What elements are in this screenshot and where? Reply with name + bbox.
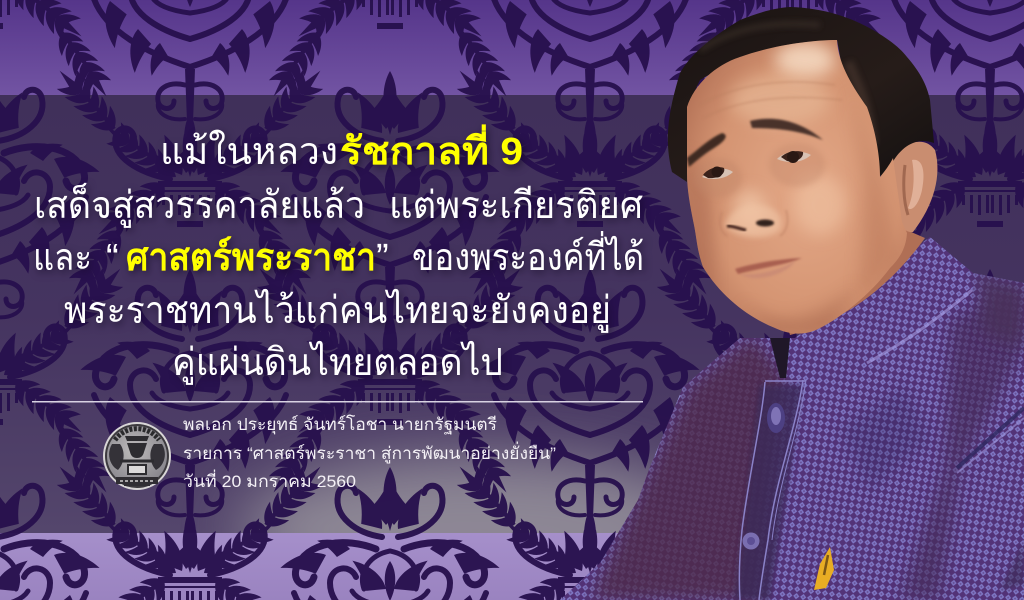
seal bottom band [116,477,158,486]
seal urn [125,436,149,458]
caption line 1: speaker: พลเอก ประยุทธ์ จันทร์โอชา นายกรัฐมนตรี [183,414,497,435]
source caption [183,414,556,491]
mouth [735,258,802,274]
jacket [560,230,1024,600]
quote line 3 [33,231,644,279]
quote line 1: รัชกาลที่ 9 [340,124,523,173]
placket stitching [739,382,765,600]
lapel pin [814,547,834,590]
quote line 4: พระราชทานไว้แก่คนไทยจะยังคงอยู่ [64,289,611,333]
cheek highlights [794,175,846,235]
caption line 2: programme: รายการ “ศาสตร์พระราชา สู่การพัฒนาอย่างยั่งยืน” [183,441,556,464]
seal lions [109,444,165,470]
panel: dark translucent band behind quote [0,95,1024,533]
quote line 2: แต่พระเกียรติยศ [389,185,643,227]
quote line 3: ของพระองค์ที่ได้ [412,231,644,279]
face [680,30,910,340]
quote line 2 [34,182,643,228]
eyes [702,169,733,179]
eyebrows [687,133,726,167]
quote line 3: “ [106,237,119,279]
quote line 1 [160,124,523,173]
quote line 3: ” [376,237,389,279]
caption line 3: date: วันที่ 20 มกราคม 2560 [183,469,356,491]
buttons [767,403,785,433]
quote text [33,124,644,385]
seal top lettering [115,429,159,440]
quote line 1: แม้ในหลวง [160,130,338,173]
portrait: man in purple silk jacket [560,7,1024,600]
quote line 2: เสด็จสู่สวรรคาลัยแล้ว [34,182,365,228]
neck [780,225,925,335]
forehead wrinkles [736,81,828,106]
hair [668,7,934,182]
divider line [32,401,643,402]
quote line 3: ศาสตร์พระราชา [126,236,376,279]
collar [787,280,973,378]
eye sockets [714,161,740,194]
arm fold [957,408,1024,468]
edge shadows [688,172,716,280]
seal plaque [128,465,146,474]
quote line 3: และ [33,237,92,279]
quote line 5: คู่แผ่นดินไทยตลอดไป [172,341,503,385]
icon: government seal [103,422,171,490]
ear [893,142,937,232]
nose [724,205,781,237]
forehead highlight [775,42,835,78]
